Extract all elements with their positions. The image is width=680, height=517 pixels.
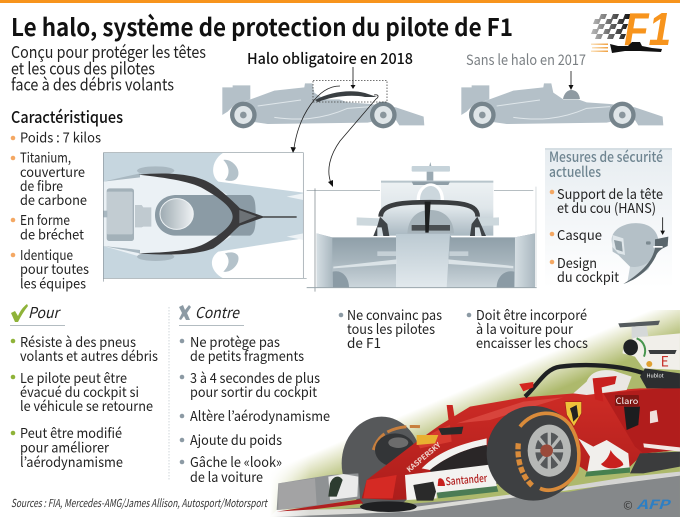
photo: Ferrari F1 with halo: Santander (445, 471, 488, 489)
contre list: pour sortir du cockpit (190, 381, 317, 401)
contre column 2: Ne convainc pas (347, 304, 442, 324)
Claro sponsor (615, 395, 639, 406)
contre column 3: encaisser les chocs (476, 332, 588, 352)
road (277, 472, 680, 517)
contre column 3: à la voiture pour (476, 318, 574, 338)
title: Le halo, système de protection du pilote de F1 (11, 8, 513, 43)
rear car above (618, 321, 680, 372)
pour heading: Pour (28, 302, 61, 323)
heading: Sans le halo en 2017: Sans le halo en 2017 (466, 49, 586, 70)
contre list: Altère l’aérodynamisme (190, 405, 330, 425)
characteristics list: Titanium, (20, 146, 71, 166)
icon: helmet and HANS (612, 217, 668, 284)
sources: Sources : FIA, Mercedes-AMG/James Allison, Autosport/Motorsport (11, 495, 268, 511)
credit: AFP: © (623, 497, 633, 513)
side car without halo 2017 (461, 71, 663, 128)
panel: current safety measures (545, 147, 672, 288)
panel list: safety measures: du cockpit (557, 266, 619, 286)
panel list: safety measures: Support de la tête (557, 183, 663, 203)
nose lower (363, 475, 397, 498)
characteristics list: de carbone (20, 189, 87, 209)
contre list: de la voiture (190, 466, 263, 486)
nose sponsor (417, 425, 452, 448)
pour list: Le pilote peut être (20, 367, 127, 387)
panel list: safety measures: Casque (557, 224, 602, 244)
subtitle (11, 39, 206, 96)
front wing white (405, 464, 497, 500)
Ferrari badge (565, 402, 582, 427)
contre column 2: tous les pilotes (347, 318, 435, 338)
photo left fade (270, 437, 310, 517)
contre list: Ne protège pas (190, 331, 280, 351)
photo: Ferrari F1 with halo: Hublot (647, 371, 664, 379)
pour column (10, 302, 158, 471)
contre list: Ajoute du poids (190, 429, 282, 449)
front tyre (487, 406, 580, 501)
characteristics list: de bréchet (20, 224, 84, 244)
logo: F1: F1 (624, 3, 671, 55)
logo: F1 (591, 3, 671, 55)
halo arc (525, 365, 648, 397)
characteristics list: pour toutes (20, 258, 89, 278)
front wing left (277, 473, 360, 510)
pour list: l’aérodynamisme (20, 451, 123, 471)
pour list: volants et autres débris (20, 345, 158, 365)
characteristics list: En forme (20, 209, 70, 229)
rear-left tyre (342, 417, 422, 510)
heading: Halo obligatoire en 2018: Halo obligatoire en 2018 (247, 48, 413, 69)
pour list: Résiste à des pneus (20, 331, 136, 351)
driver helmet (573, 370, 632, 395)
arrow: halo to top view (290, 86, 340, 153)
side car with halo 2018 (222, 67, 424, 128)
photo: Ferrari F1 with halo: Claro (616, 395, 638, 407)
panel heading (549, 147, 663, 182)
characteristics list: couverture (20, 161, 85, 181)
photo: Ferrari F1 with halo: KASPERSKY (404, 439, 444, 475)
characteristics heading: Caractéristiques (11, 104, 123, 128)
contre column 2: de F1 (347, 332, 381, 352)
photo: Ferrari F1 with halo (270, 310, 680, 517)
subtitle: face à des débris volants (11, 72, 174, 96)
pour list (11, 331, 158, 471)
panel heading: actuelles (549, 162, 601, 182)
contre list: 3 à 4 secondes de plus (190, 367, 320, 387)
pour list: évacué du cockpit si (20, 381, 139, 401)
icon: check (11, 304, 28, 322)
contre column 2 (339, 304, 442, 352)
pour list: pour améliorer (20, 436, 110, 456)
panel heading: Mesures de sécurité (549, 147, 663, 167)
subtitle: et les cous des pilotes (11, 56, 155, 80)
panel list: safety measures (550, 183, 663, 286)
panel list: safety measures: Design (557, 252, 597, 272)
pour list: Peut être modifié (20, 422, 122, 442)
contre column 3: Doit être incorporé (476, 304, 587, 324)
contre list: de petits fragments (190, 345, 304, 365)
front view diagram (307, 162, 537, 292)
characteristics list: de fibre (20, 175, 63, 195)
contre column 3 (467, 304, 588, 352)
red body (362, 388, 680, 500)
grass background (270, 310, 680, 517)
contre list (180, 331, 330, 486)
arrow: halo to front view (328, 95, 378, 187)
contre list: Gâche le «look» (190, 451, 282, 471)
icon: cross (179, 305, 191, 320)
credit: AFP (623, 494, 673, 513)
characteristics list: Poids : 7 kilos (20, 126, 101, 146)
subtitle: Conçu pour protéger les têtes (11, 39, 206, 63)
panel list: safety measures: et du cou (HANS) (557, 197, 656, 217)
contre heading: Contre (195, 302, 241, 323)
characteristics list: Identique (20, 244, 73, 264)
contre column (179, 302, 330, 486)
sidepod (578, 438, 630, 475)
winglets (447, 405, 455, 422)
characteristics list: les équipes (20, 272, 86, 292)
characteristics list (11, 126, 101, 292)
top view diagram (103, 153, 307, 282)
top orange bar (0, 0, 680, 3)
pour list: le véhicule se retourne (20, 395, 153, 415)
rear car above: E (661, 352, 669, 372)
credit: AFP: AFP (635, 494, 673, 513)
